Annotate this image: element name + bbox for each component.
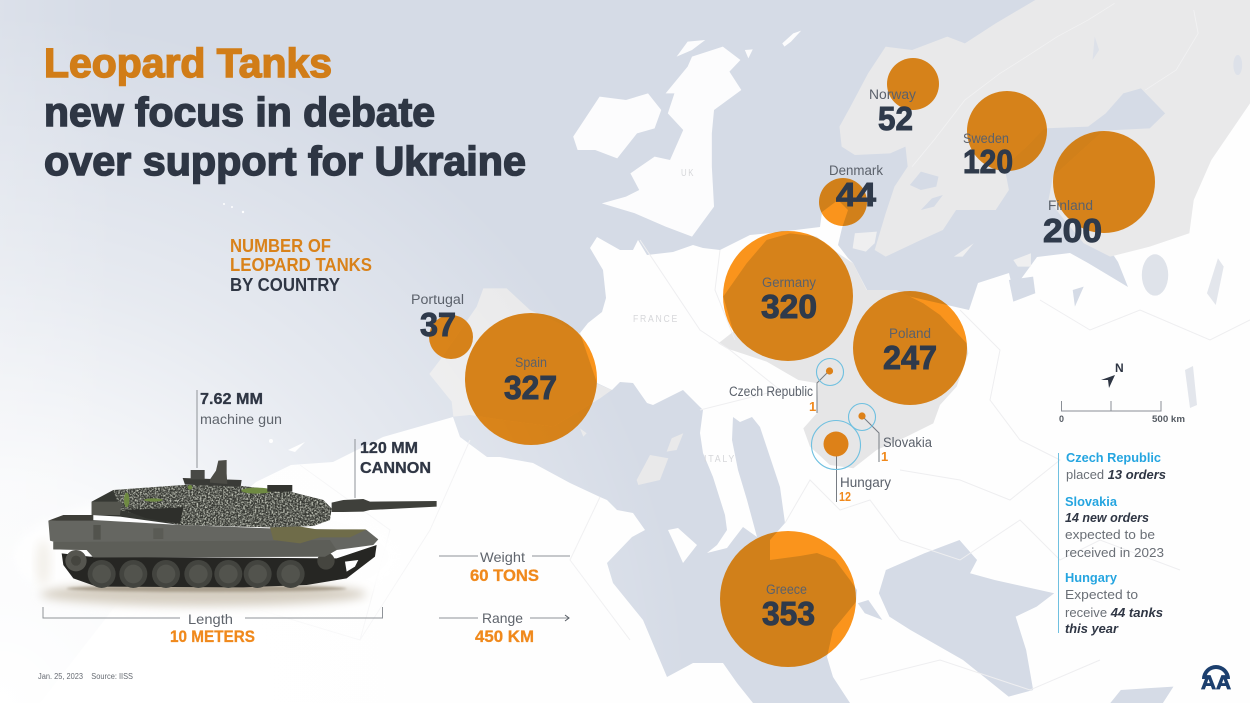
note: Hungary: Hungary [1065,570,1118,585]
tracks and road wheels [62,545,377,588]
circle: Spain [465,313,597,445]
scale bar [1059,401,1185,424]
label: Norway: Norway [869,87,916,102]
circle: Finland [1053,131,1155,233]
icon: north arrow: N [1115,361,1124,375]
label: Hungary: Hungary [840,475,891,490]
circle: Denmark [819,178,867,226]
label: Spain: 327 [504,369,557,406]
northern islands [677,31,801,58]
tank photo [13,460,437,620]
logo: Anadolu Agency [1201,665,1231,694]
panel: new orders notes [1058,450,1166,636]
circle: Portugal [429,315,473,359]
label: Portugal: 37 [420,306,456,343]
circle: Greece [720,531,856,667]
callout: cannon: CANNON [360,460,431,477]
note: Hungary [1065,570,1163,636]
Black Sea and Caspian [858,540,1173,703]
note: Hungary: this year [1065,621,1119,636]
land tint inside the circles [429,0,1250,468]
Atlantic specks [223,203,305,452]
spec: weight: 60 TONS [470,566,539,585]
label: Finland: 200 [1043,212,1102,249]
land: continental Europe and Asia [580,90,1250,703]
label: Czech Republic: 1 [809,399,816,414]
label: Spain: Spain [515,355,547,370]
note: Czech Republic [1066,450,1166,482]
date and source: Jan. 25, 2023 Source: IISS [38,672,133,681]
label: Slovakia: 1 [881,449,888,464]
callout: machine gun: 7.62 MM [200,391,263,408]
spec: weight: Weight [480,549,525,565]
spec: range with arrow: Range [482,610,523,626]
hull [48,515,378,557]
callout: cannon: 120 MM [360,440,418,457]
title: over support for Ukraine [44,138,526,184]
marker: Czech Republic [816,358,844,413]
subtitle: number of Leopard tanks by country: NUMBER OF [230,236,331,256]
subtitle: number of Leopard tanks by country: BY COUNTRY [230,275,340,295]
note: Slovakia: received in 2023 [1065,545,1164,560]
label: Poland: 247 [883,339,937,376]
scale bar: 500 km [1152,414,1185,424]
label: Finland: Finland [1048,198,1093,213]
callout: cannon [355,439,431,498]
main gun barrel [332,499,437,512]
spec: range with arrow [439,610,569,646]
label: Denmark: 44 [836,176,877,213]
roof hatch, machine gun and crewman [183,478,242,487]
subtitle: number of Leopard tanks by country: LEOPARD TANKS [230,255,372,275]
Danish islands and Gotland [853,232,1031,267]
circle: Poland [853,291,967,405]
callout: machine gun [197,390,282,468]
ground halo and dust [13,493,400,620]
label: Poland: Poland [889,326,931,341]
land: North Africa [40,417,753,703]
faint map labels: ITALY [704,454,736,465]
circle: Germany [723,231,853,361]
callout: machine gun: machine gun [200,411,282,427]
label: Norway: 52 [878,100,913,137]
note: Czech Republic: Czech Republic [1066,450,1161,465]
marker: Hungary [812,420,860,502]
title [44,40,526,184]
label: Norway [869,87,916,137]
spec: range with arrow: 450 KM [475,627,534,646]
faint map labels: UK [681,168,695,179]
circle: Sweden [967,91,1047,171]
inland lake east [1185,366,1197,408]
label: Slovakia: Slovakia [883,435,932,450]
note: Czech Republic: placed 13 orders [1066,467,1166,482]
land: Scandinavia and Finland [573,0,1250,307]
label: Portugal: Portugal [411,292,464,307]
spec: length: 10 METERS [170,627,255,646]
land: Spain and Portugal [429,288,683,485]
note: Hungary: receive 44 tanks [1065,605,1163,620]
label: Czech Republic [729,384,816,414]
Great Britain [602,47,741,237]
turret with camouflage net [92,460,332,527]
label: Sweden: 120 [963,143,1013,180]
Ireland [573,93,661,158]
label: Hungary [839,475,891,504]
Sardinia, Corsica and Balearic islands [580,428,683,485]
note: Slovakia: Slovakia [1065,494,1118,509]
icon: north arrow [1101,361,1124,388]
spec: length: Length [188,611,233,627]
lakes in Scandinavia and Russia [910,37,1242,307]
faint map labels [633,168,736,465]
label: Greece: 353 [762,595,815,632]
title: Leopard Tanks [44,40,332,86]
label: Greece: Greece [766,582,807,597]
label: Portugal [411,292,464,343]
label: Czech Republic: Czech Republic [729,384,813,399]
label: Hungary: 12 [839,489,851,504]
note: Slovakia: 14 new orders [1065,510,1149,525]
spec: weight [439,549,570,585]
marker: Slovakia [848,404,879,462]
note: Slovakia: expected to be [1065,527,1155,542]
title: new focus in debate [44,89,435,135]
label: Denmark: Denmark [829,163,883,178]
faint map labels: FRANCE [633,314,679,325]
label: Germany: Germany [762,275,816,290]
subtitle: number of Leopard tanks by country [230,236,372,295]
spec: length [43,607,382,646]
note: Hungary: Expected to [1065,587,1138,602]
note: Slovakia [1065,494,1164,560]
land: Sicily [668,528,697,563]
label: Sweden: Sweden [963,131,1009,146]
label: Germany: 320 [761,288,817,325]
label: Denmark [829,163,883,213]
logo: Anadolu Agency: AA [1201,673,1231,694]
scale bar: 0 [1059,414,1064,424]
country borders [260,240,1250,690]
circle: Norway [887,58,939,110]
land: Germany, Poland, Czech Republic, Slovakia, Hungary [718,233,968,468]
label: Slovakia [881,435,932,464]
label: Finland [1043,198,1102,249]
